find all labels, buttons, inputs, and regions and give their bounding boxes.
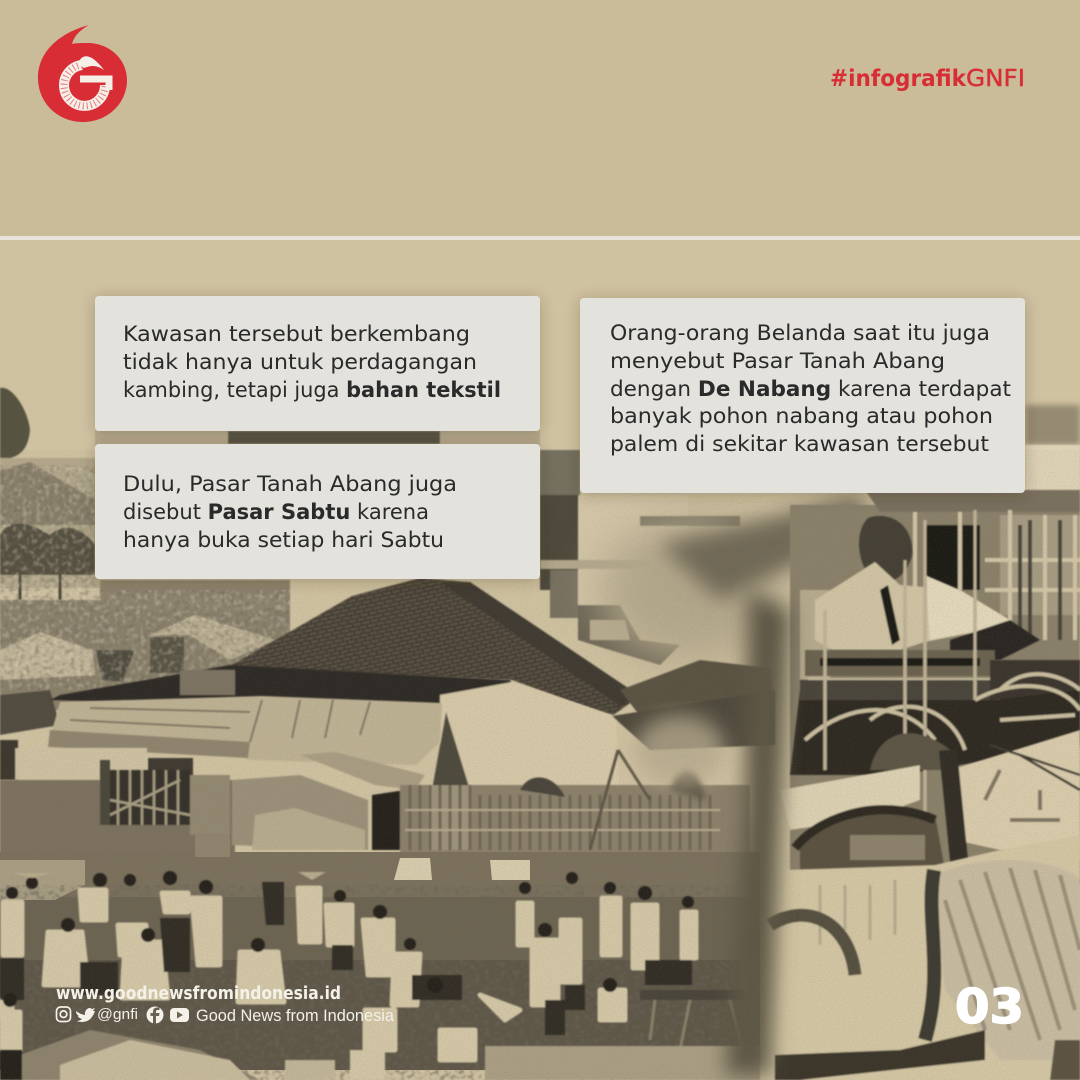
- hashtag: GNFI: [966, 66, 1025, 92]
- hashtag: #infografik: [830, 66, 967, 92]
- carriage driver: [815, 516, 1040, 660]
- card: pasar sabtu: [95, 444, 540, 579]
- logo: red swirl: [38, 25, 127, 122]
- right photo: carriage background: [790, 490, 1080, 885]
- market texture: [0, 465, 290, 690]
- card text: tidak hanya untuk perdagangan: [123, 350, 477, 374]
- horse: [770, 835, 1080, 1080]
- card text: dengan De Nabang karena terdapat: [610, 377, 1011, 401]
- blurred fog behind the smear: [600, 520, 780, 660]
- card text: Orang-orang Belanda saat itu juga: [610, 321, 990, 345]
- corrugated roofs: [15, 696, 442, 820]
- header background band: [0, 0, 1080, 237]
- footer: website and social: [56, 983, 395, 1025]
- card text: Dulu, Pasar Tanah Abang juga: [123, 472, 457, 496]
- photo collage: Pasar Tanah Abang: [0, 387, 1080, 1080]
- divider line: [0, 236, 1080, 240]
- fence and sheds: [0, 750, 750, 855]
- card: bahan tekstil: [95, 296, 540, 431]
- page number: 03: [955, 980, 1024, 1035]
- icon: facebook: [146, 1006, 164, 1024]
- card text: kambing, tetapi juga bahan tekstil: [123, 378, 501, 402]
- page name: Good News from Indonesia: [196, 1006, 395, 1025]
- crowd texture: [0, 885, 722, 1080]
- card text: banyak pohon nabang atau pohon: [610, 404, 993, 428]
- card text: Kawasan tersebut berkembang: [123, 322, 470, 346]
- dark blurred smear: [725, 590, 790, 1075]
- white colonial building: [540, 495, 740, 665]
- handle: @gnfi: [97, 1006, 138, 1023]
- card text: disebut Pasar Sabtu karena: [123, 500, 429, 524]
- card text: [610, 321, 1011, 456]
- icon: youtube: [170, 1008, 189, 1022]
- sky and distant skyline: [0, 388, 1080, 600]
- icon: instagram: [56, 1007, 70, 1022]
- market stalls and tables foreground: [0, 990, 760, 1080]
- website url: www.goodnewsfromindonesia.id: [56, 983, 341, 1004]
- photo grain: [0, 450, 1080, 1080]
- card text: hanya buka setiap hari Sabtu: [123, 528, 444, 552]
- icon: twitter: [76, 1008, 95, 1022]
- white carriage panels: [780, 730, 1080, 870]
- logo: [38, 25, 127, 122]
- ground: [0, 852, 760, 1062]
- card text: [123, 472, 457, 552]
- carriage seat and hood: [790, 510, 1080, 830]
- card text: menyebut Pasar Tanah Abang: [610, 349, 945, 373]
- main tiled roof: [232, 578, 772, 716]
- card text: [123, 322, 501, 402]
- left market stalls: [0, 580, 290, 780]
- crowd of market-goers: [0, 871, 696, 1060]
- logo: white garuda emblem: [64, 56, 109, 106]
- card text: palem di sekitar kawasan tersebut: [610, 432, 989, 456]
- card: de nabang: [580, 298, 1025, 493]
- wall below roof: [50, 665, 775, 795]
